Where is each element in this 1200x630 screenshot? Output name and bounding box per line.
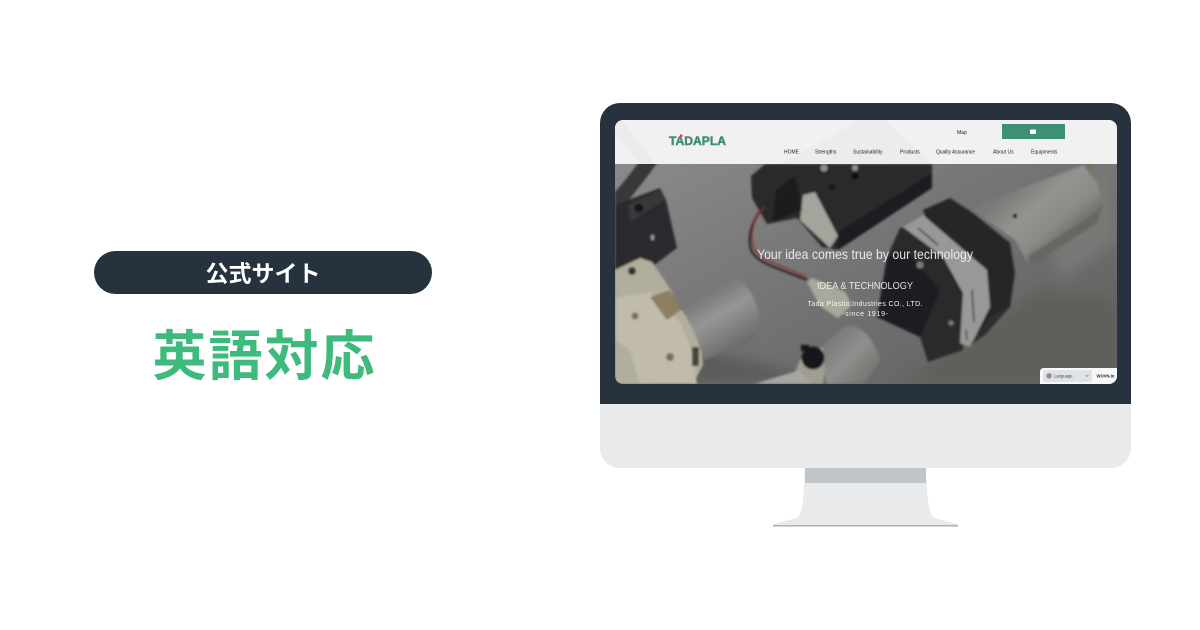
main navigation: Equipments xyxy=(1031,150,1058,156)
photo: silver motor xyxy=(682,278,760,360)
monitor chin xyxy=(600,403,1131,468)
main navigation xyxy=(784,150,1058,154)
monitor bezel xyxy=(600,103,1131,404)
photo: large motor xyxy=(973,165,1103,267)
photo: belt ring and left black part xyxy=(615,164,658,206)
main navigation: Sustainability xyxy=(853,150,883,156)
infographic canvas xyxy=(94,103,1131,527)
photo: black pump xyxy=(923,198,1015,345)
monitor illustration xyxy=(600,103,1131,527)
website screen xyxy=(615,120,1117,384)
photo: red and black wire xyxy=(750,203,807,280)
contact button xyxy=(1002,124,1065,139)
language widget xyxy=(1040,368,1117,384)
main navigation: Products xyxy=(900,150,920,156)
pill badge: 公式サイト xyxy=(206,260,320,286)
language widget: Language xyxy=(1054,374,1073,378)
photo: bottom motor xyxy=(795,346,826,384)
hero copy xyxy=(757,247,973,318)
company name: Tada Plastic Industries CO., LTD. xyxy=(808,301,923,308)
left label group xyxy=(94,251,432,387)
utility link: Map: Map xyxy=(957,130,967,136)
main navigation: HOME xyxy=(784,150,800,156)
heading: 英語対応 xyxy=(152,327,374,387)
main navigation: Strengths xyxy=(815,150,837,156)
pill badge xyxy=(94,251,432,294)
photo: top black block xyxy=(751,164,932,250)
monitor stand xyxy=(773,468,958,527)
logo: TADAPLA: TADAPLA xyxy=(669,134,726,148)
photo: cream pump xyxy=(615,258,703,384)
hero tagline: Your idea comes true by our technology xyxy=(757,247,973,262)
main navigation: Quality Assurance xyxy=(936,150,975,156)
founding year: -since 1919- xyxy=(842,311,889,318)
hero photo xyxy=(615,120,1117,384)
language widget: WOVN.io xyxy=(1096,374,1115,378)
site header bar xyxy=(615,120,1117,164)
main navigation: About Us xyxy=(993,150,1014,156)
hero subtitle: IDEA & TECHNOLOGY xyxy=(817,280,913,292)
